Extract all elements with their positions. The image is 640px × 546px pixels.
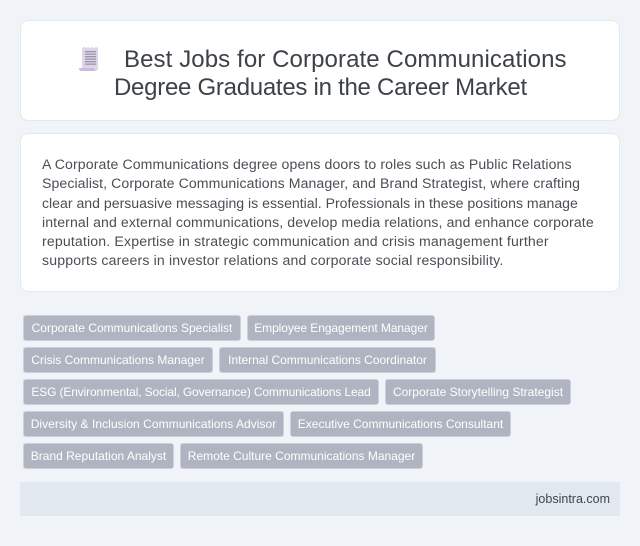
job tags xyxy=(23,315,571,469)
tag xyxy=(23,315,241,341)
tag xyxy=(219,347,436,373)
tag: Internal Communications Coordinator xyxy=(228,353,427,367)
tag: Remote Culture Communications Manager xyxy=(188,449,415,463)
tag: Corporate Communications Specialist xyxy=(32,321,232,335)
description text xyxy=(42,156,594,268)
title line 2: Degree Graduates in the Career Market xyxy=(114,74,527,101)
tag: Executive Communications Consultant xyxy=(298,417,503,431)
title line 1: Best Jobs for Corporate Communications xyxy=(124,46,567,73)
tag xyxy=(180,443,423,469)
tag xyxy=(385,379,571,405)
icon: document scroll xyxy=(79,47,98,71)
description text: reputation. Expertise in strategic communication and crisis management further xyxy=(42,233,549,249)
description text: clear and persuasive messaging is essential. Professionals in these positions manage xyxy=(42,195,578,211)
description text: supports careers in investor relations and corporate social responsibility. xyxy=(42,252,503,268)
tag: Diversity & Inclusion Communications Advisor xyxy=(31,417,276,431)
panel: description xyxy=(20,133,620,292)
tag: Brand Reputation Analyst xyxy=(31,449,166,463)
tag xyxy=(247,315,435,341)
description text: internal and external communications, develop media relations, and enhance corporate xyxy=(42,214,594,230)
tag xyxy=(23,411,284,437)
tag xyxy=(23,443,174,469)
footer bar xyxy=(20,482,620,516)
footer source: jobsintra.com xyxy=(536,492,610,506)
tag: Crisis Communications Manager xyxy=(31,353,205,367)
tag xyxy=(23,347,213,373)
tag xyxy=(23,379,379,405)
tag: ESG (Environmental, Social, Governance) Communications Lead xyxy=(31,385,371,399)
panel: title card xyxy=(20,20,620,121)
tag xyxy=(290,411,511,437)
description text: Specialist, Corporate Communications Manager, and Brand Strategist, where crafting xyxy=(42,175,580,191)
tag: Employee Engagement Manager xyxy=(254,321,428,335)
tag: Corporate Storytelling Strategist xyxy=(393,385,563,399)
description text: A Corporate Communications degree opens doors to roles such as Public Relations xyxy=(42,156,572,172)
